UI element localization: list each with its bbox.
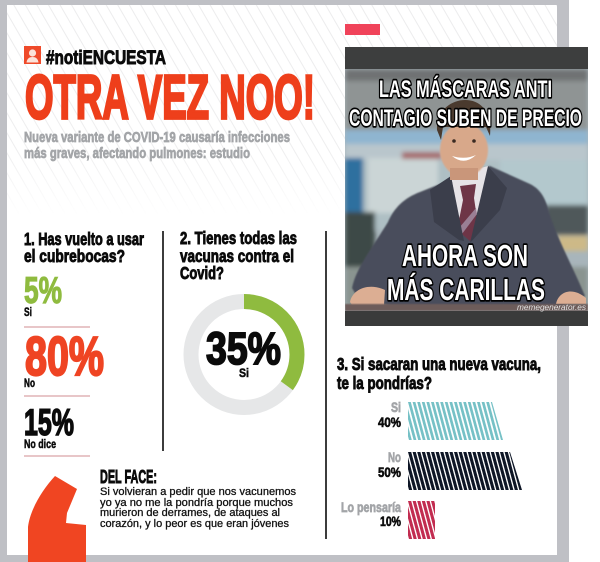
face [440, 127, 489, 173]
question 3 heading [337, 354, 541, 393]
donut chart: Si [239, 366, 249, 380]
callout text: murieron de derrames, de ataques al [100, 507, 280, 519]
meme caption bottom [387, 243, 546, 302]
stat: 5% si: 5% [24, 270, 62, 311]
news anchor [350, 100, 586, 308]
bar: si 40% [378, 400, 503, 440]
bar: lo pensaria 10% [341, 500, 435, 539]
donut value: 35% [206, 323, 281, 374]
red accent bar [345, 24, 380, 35]
hands [350, 287, 385, 305]
icon: user [24, 46, 41, 64]
suit [352, 166, 585, 308]
question 2 heading: vacunas contra el [180, 246, 294, 266]
question 1 heading: 1. Has vuelto a usar [24, 229, 144, 249]
stat: 80% no: No [24, 378, 35, 390]
meme photo [345, 47, 588, 326]
shirt [452, 166, 488, 218]
question 1 heading [24, 229, 144, 266]
bar: no 50%: No [388, 450, 401, 465]
callout heading: DEL FACE: [100, 467, 157, 487]
bar: no 50%: 50% [378, 465, 401, 480]
stat: 15% no dice: No dice [24, 439, 56, 451]
question 3 heading: 3. Si sacaran una nueva vacuna, [337, 354, 541, 374]
stat: 80% no: 80% [25, 325, 104, 387]
lapels [430, 176, 464, 241]
bar: si 40%: Si [391, 400, 401, 415]
top band [345, 47, 588, 69]
callout: del face [28, 467, 296, 562]
callout text: yo ya no me la pondría porque muchos [100, 497, 294, 509]
stat: 5% si [24, 270, 62, 319]
question 2 heading [180, 228, 297, 283]
title: OTRA VEZ NOO! [25, 64, 315, 132]
icon: quote mark [28, 476, 86, 562]
subtitle: Nueva variante de COVID-19 causaría infecciones [24, 130, 290, 146]
bar: no 50% [378, 450, 522, 490]
question 3 heading: te la pondrías? [337, 373, 432, 393]
panel: question 1 [24, 229, 144, 456]
meme caption bottom: AHORA SON [402, 238, 528, 273]
office background [345, 69, 588, 307]
question 2 heading: Covid? [180, 263, 224, 283]
question 2 heading: 2. Tienes todas las [180, 228, 297, 248]
callout text: Si volvieran a pedir que nos vacunemos [100, 486, 296, 498]
callout text: corazón, y lo peor es que eran jóvenes [100, 518, 289, 530]
meme caption top [349, 75, 582, 132]
donut chart [191, 302, 297, 408]
subtitle [24, 130, 290, 162]
bar: si 40%: 40% [378, 415, 401, 430]
bar: lo pensaria 10%: Lo pensaría [341, 500, 401, 515]
panel: question 3 [337, 354, 541, 539]
header tag [24, 46, 166, 69]
panel: question 2 [180, 228, 297, 408]
stat: 5% si: Si [24, 307, 32, 319]
stat: 80% no [24, 325, 104, 390]
stat: 15% no dice [24, 402, 74, 451]
tie [460, 184, 476, 241]
bar: lo pensaria 10%: 10% [380, 514, 401, 529]
bottom band [345, 311, 588, 326]
question 1 heading: el cubrebocas? [24, 246, 125, 266]
desk [345, 304, 588, 311]
callout text [100, 486, 296, 530]
watermark: memegenerator.es [517, 303, 586, 312]
hashtag: #notiENCUESTA [46, 48, 166, 69]
stat: 15% no dice: 15% [24, 402, 74, 443]
subtitle: más graves, afectando pulmones: estudio [24, 146, 250, 162]
